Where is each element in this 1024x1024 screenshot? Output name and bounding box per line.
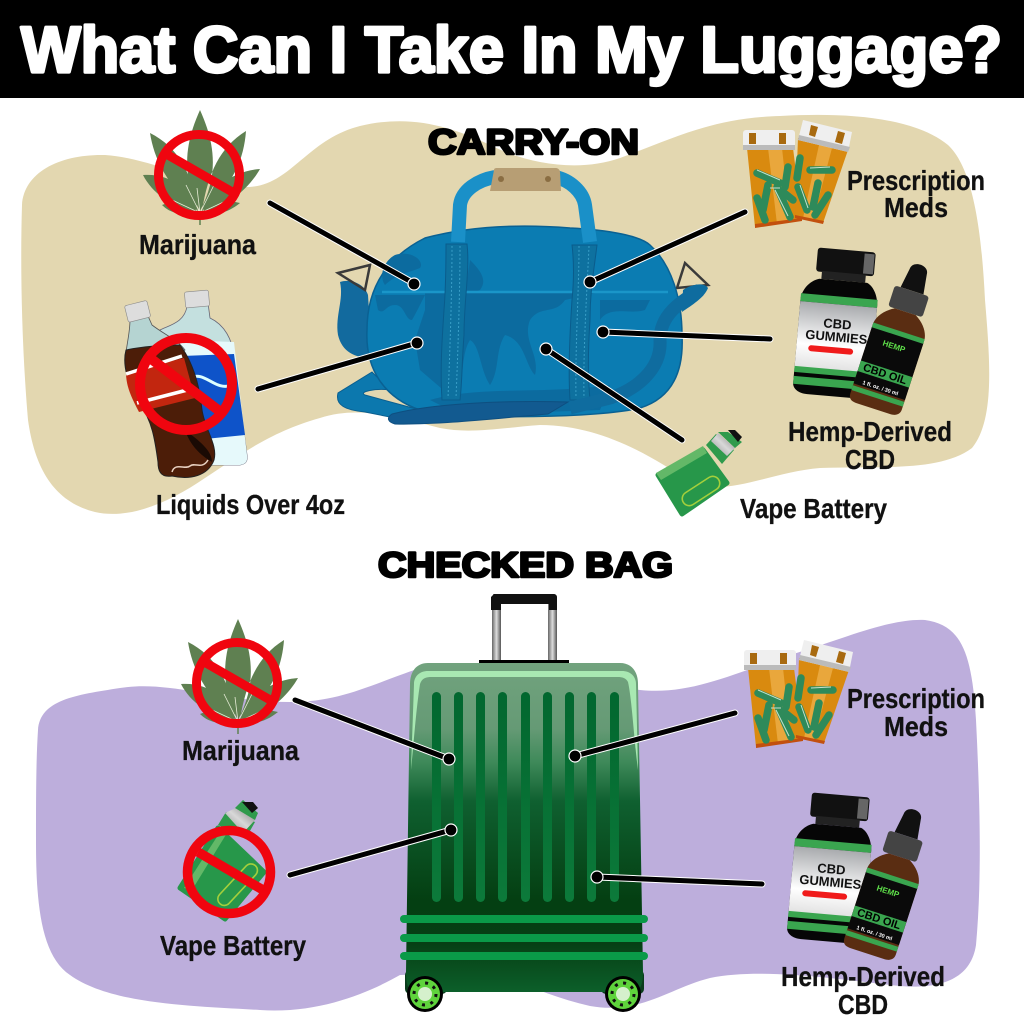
label: marijuana, checked bag: Marijuana (182, 735, 299, 766)
wheel housings (405, 970, 447, 994)
label: prescription meds, carry-on: Prescription (847, 165, 985, 196)
icon: gummies jar (786, 791, 876, 944)
icon: cbd oil dropper bottle: 1 fl. oz. / 30 ml (862, 380, 899, 398)
icon: cbd oil dropper bottle: CBD OIL (861, 362, 908, 387)
panel: carry-on background blob (21, 115, 989, 514)
label: hemp-derived cbd, carry-on: Hemp-Derived (788, 416, 952, 447)
icon: cbd oil dropper bottle: HEMP (876, 884, 901, 900)
icon: CBD products, carry-on (792, 246, 946, 417)
title banner: What Can I Take In My Luggage? (21, 13, 1002, 86)
side strap left (337, 281, 372, 358)
vertical straps (441, 244, 597, 400)
side strap right (677, 263, 708, 288)
icon: prescription meds, checked bag (744, 640, 853, 748)
icon: gummies jar: CBD (817, 860, 846, 878)
wheels (407, 976, 641, 1012)
label: hemp-derived cbd, checked bag: Hemp-Derived (781, 961, 945, 992)
connectors: checked bag pointers (290, 700, 762, 884)
icon: banned vape battery (180, 800, 270, 919)
connectors: carry-on pointers (258, 203, 770, 440)
label: hemp-derived cbd, carry-on: CBD (845, 444, 895, 475)
handle (458, 177, 590, 242)
icon: gummies jar (792, 246, 882, 399)
icon: vape battery, carry-on (656, 430, 742, 514)
icon: blue water bottle (160, 290, 247, 465)
label: hemp-derived cbd, checked bag: CBD (838, 989, 888, 1020)
icon: blue duffel carry-on bag (337, 168, 708, 424)
pocket seam (382, 291, 668, 293)
icon: prescription meds, carry-on (743, 120, 852, 228)
telescopic handle (479, 594, 569, 664)
bag body (367, 226, 682, 417)
icon: cbd oil dropper bottle: HEMP (882, 339, 907, 355)
camo patches (375, 254, 650, 415)
shoulder strap (570, 290, 700, 408)
icon: cbd oil dropper bottle: CBD OIL (855, 907, 902, 932)
icon: cola bottle (124, 300, 215, 477)
icon: gummies jar: GUMMIES (805, 327, 868, 347)
handle tag (490, 168, 561, 191)
highlight (411, 671, 638, 770)
icon: banned liquids (124, 290, 247, 477)
shell (406, 663, 643, 992)
icon: gummies jar: CBD (823, 315, 852, 333)
label: prescription meds, carry-on: Meds (884, 192, 948, 223)
label: prescription meds, checked bag: Prescription (847, 683, 985, 714)
icon: cbd oil dropper bottle (842, 801, 940, 962)
label: prescription meds, checked bag: Meds (884, 711, 948, 742)
icon: banned marijuana, checked bag (181, 619, 298, 734)
heading: checked bag: CHECKED BAG (378, 546, 673, 585)
icon: gummies jar: GUMMIES (799, 872, 862, 892)
icon: banned marijuana, carry-on (143, 110, 260, 225)
icon: cbd oil dropper bottle: 1 fl. oz. / 30 ml (856, 925, 893, 943)
label: vape battery, checked bag: Vape Battery (160, 930, 306, 961)
horizontal ribs (400, 915, 648, 960)
grooves (432, 692, 619, 902)
heading: carry-on: CARRY-ON (428, 123, 639, 162)
label: liquids over 4oz: Liquids Over 4oz (156, 489, 345, 520)
icon: green hardshell suitcase (400, 594, 648, 1012)
icon: CBD products, checked bag (786, 791, 940, 962)
label: vape battery, carry-on: Vape Battery (740, 493, 887, 524)
label: marijuana, carry-on: Marijuana (139, 229, 256, 260)
bottom strap loop (337, 372, 420, 420)
panel: checked bag background blob (36, 620, 980, 1010)
icon: cbd oil dropper bottle (848, 256, 946, 417)
